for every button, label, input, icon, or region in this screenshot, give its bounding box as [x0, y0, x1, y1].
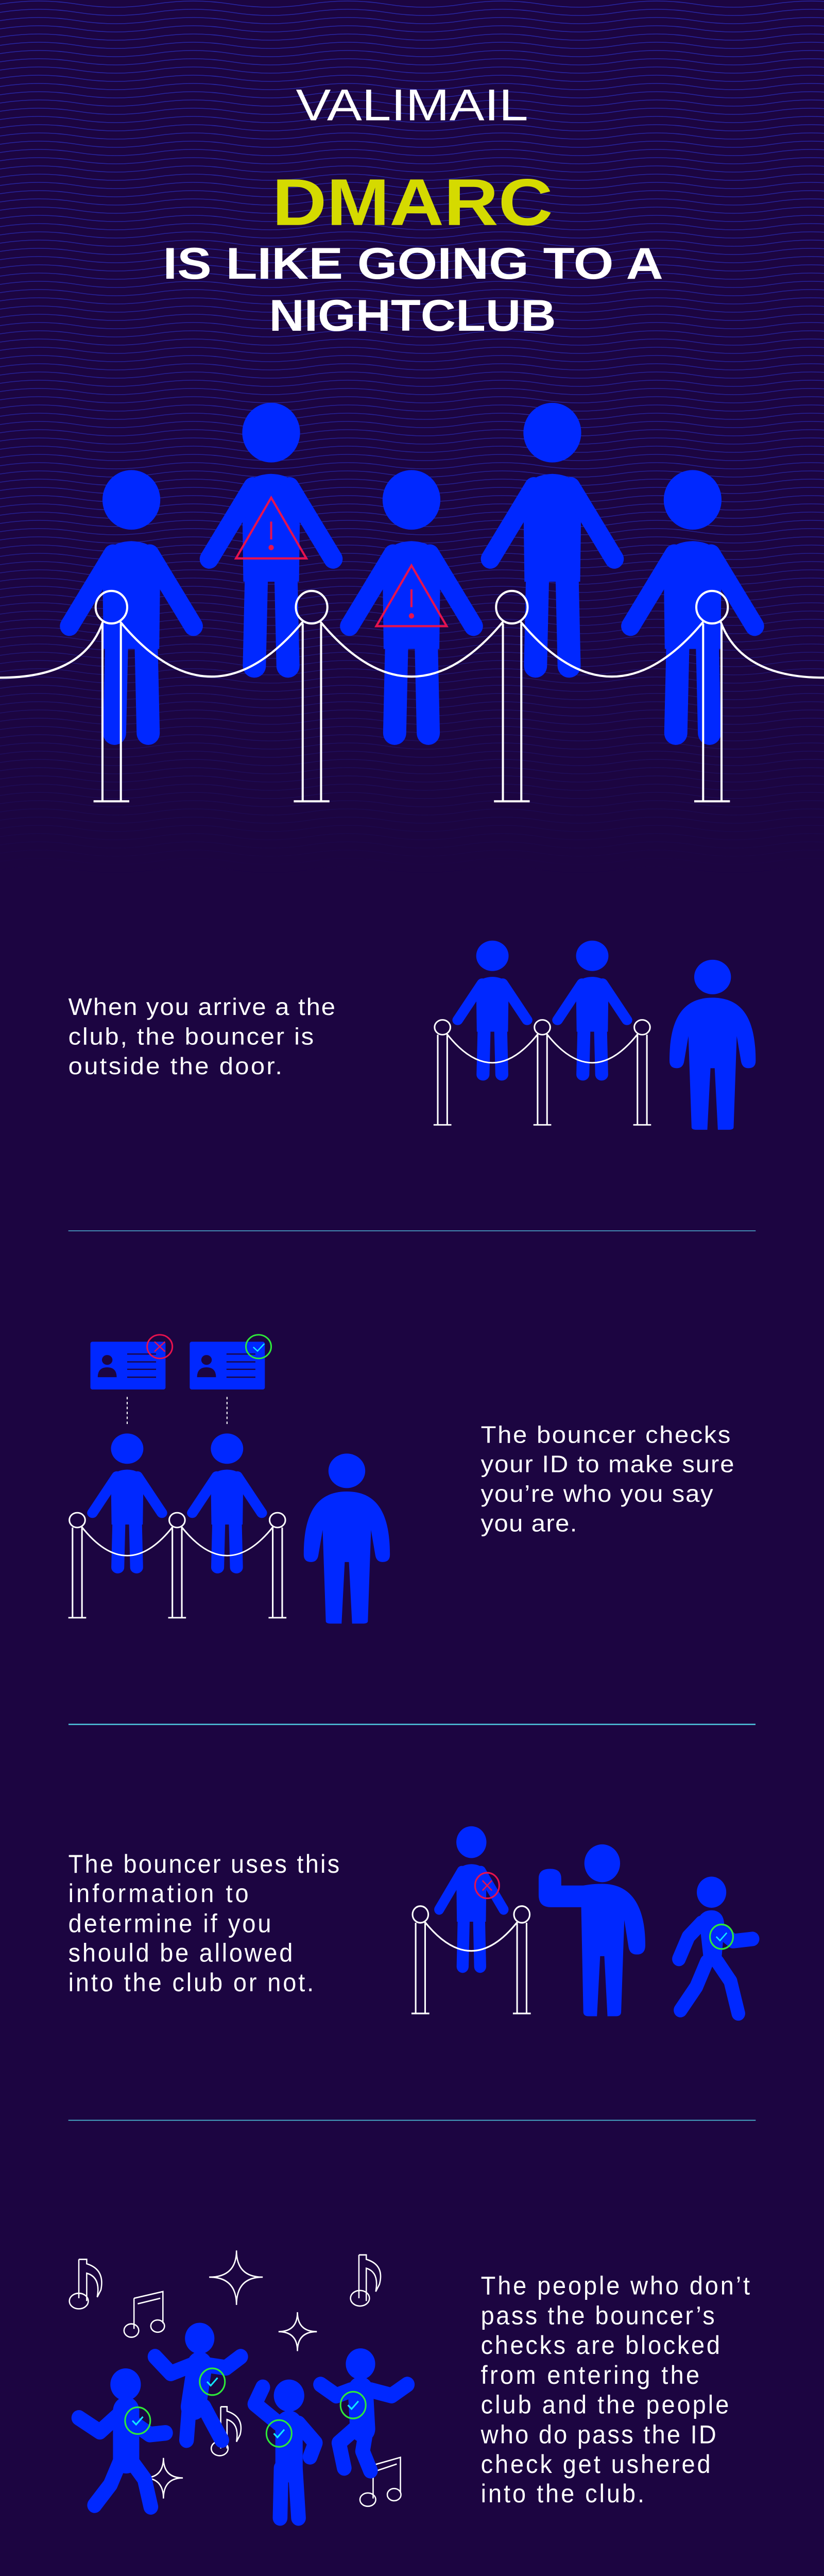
section 1 & 2 — [68, 941, 756, 1623]
text: outcome: who do pass the ID — [480, 2421, 716, 2449]
illustration: dancing in the club — [70, 2250, 407, 2518]
text: outcome: from entering the — [481, 2361, 699, 2390]
text: arrival: outside the door. — [68, 1053, 282, 1079]
text: ID check: you are. — [481, 1511, 577, 1537]
text: decision: determine if you — [68, 1909, 271, 1938]
text: outcome: club and the people — [481, 2391, 729, 2419]
hero section — [0, 80, 824, 801]
subtitle: IS LIKE GOING TO A — [163, 239, 663, 289]
icon: check marks — [125, 2368, 366, 2447]
subtitle: NIGHTCLUB — [269, 291, 556, 341]
divider — [68, 1724, 756, 1725]
wave pattern background — [0, 0, 824, 876]
sections 3 & 4 — [68, 1826, 759, 2518]
title: DMARC: DMARC — [272, 165, 553, 239]
text: outcome: into the club. — [481, 2480, 644, 2508]
walking person — [697, 1877, 726, 1908]
icon: ID card rejected — [91, 1335, 173, 1389]
icon: warning triangles — [236, 498, 447, 626]
text: arrival: When you arrive a the — [68, 994, 335, 1021]
illustration: blocked and admitted — [411, 1826, 752, 2016]
divider — [68, 1230, 756, 1231]
text: decision: The bouncer uses this — [68, 1850, 339, 1878]
divider — [68, 2120, 756, 2121]
text: arrival: club, the bouncer is — [68, 1024, 314, 1050]
text: outcome: pass the bouncer’s — [481, 2301, 715, 2330]
illustration: queue and bouncer — [434, 941, 756, 1130]
icon: music notes and sparkles — [70, 2250, 401, 2506]
hero illustration: queue behind velvet rope — [0, 403, 824, 801]
text: ID check: your ID to make sure — [481, 1451, 734, 1478]
subtitle — [163, 239, 663, 341]
text: decision: information to — [68, 1879, 249, 1908]
text: outcome: checks are blocked — [481, 2331, 720, 2360]
text: outcome: check get ushered — [481, 2450, 711, 2479]
text: outcome: The people who don’t — [481, 2272, 750, 2300]
dancers — [79, 2323, 407, 2518]
illustration: ID check — [68, 1335, 390, 1623]
text: decision: into the club or not. — [68, 1969, 314, 1997]
text: ID check: The bouncer checks — [481, 1422, 730, 1448]
text: decision: should be allowed — [68, 1939, 293, 1968]
logo: VALIMAIL — [296, 80, 528, 130]
text: ID check: you’re who you say — [481, 1481, 713, 1507]
icon: ID card accepted — [190, 1335, 271, 1389]
